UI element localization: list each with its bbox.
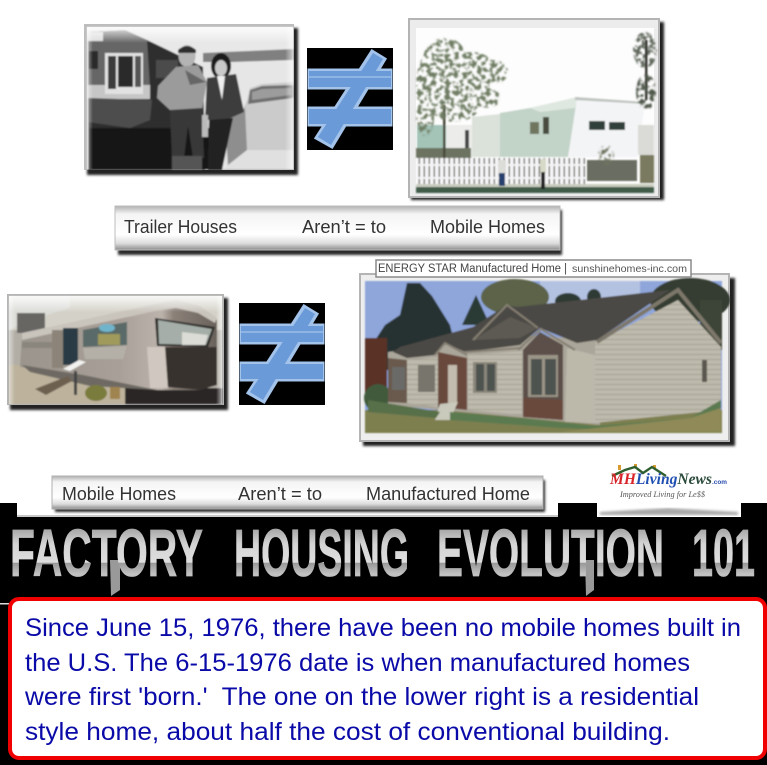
photo: energy star manufactured home — [359, 273, 735, 446]
caption: energy star manufactured home source: sunshinehomes-inc.com — [572, 263, 687, 275]
title: factory housing evolution 101: FACTORY — [10, 516, 203, 591]
logo tagline: Improved Living for Le$$ — [619, 489, 706, 499]
label: trailer houses: Trailer Houses — [124, 217, 237, 237]
photo: 1950s mobile home behind picket fence — [408, 18, 664, 200]
title: factory housing evolution 101 — [10, 516, 755, 596]
caption: energy star manufactured home source: ENERGY STAR Manufactured Home | — [378, 263, 567, 275]
callout text: style home, about half the cost of conventional building. — [25, 718, 670, 746]
black title band — [0, 495, 767, 765]
callout text: the U.S. The 6-15-1976 date is when manufactured homes — [25, 649, 690, 677]
logo wordmark: MHLivingNews — [609, 471, 712, 488]
title: factory housing evolution 101: HOUSING — [234, 516, 409, 591]
photo: silver vintage mobile home in museum — [7, 294, 228, 410]
icon: not equal sign (top) — [307, 48, 393, 150]
callout text: Since June 15, 1976, there have been no mobile homes built in — [25, 614, 741, 642]
label: aren't equal to: Aren’t = to — [238, 484, 322, 504]
callout text: were first 'born.' The one on the lower right is a residential — [24, 683, 699, 711]
caption: energy star manufactured home source — [376, 260, 691, 277]
icon: not equal sign (lower) — [239, 303, 325, 405]
photo: couple in front of trailer house — [84, 24, 298, 175]
label bar: mobile homes vs manufactured home — [52, 476, 545, 512]
label: aren't equal to: Aren’t = to — [302, 217, 386, 237]
label: mobile homes: Mobile Homes — [430, 217, 545, 237]
callout: explanatory text box — [0, 599, 765, 758]
callout text — [24, 614, 741, 746]
label bar: trailer houses vs mobile homes — [115, 206, 562, 255]
label: manufactured home: Manufactured Home — [366, 484, 530, 504]
logo: MHLivingNews: .com — [712, 480, 727, 486]
icon: green rooflines — [612, 464, 666, 476]
logo: MHLivingNews — [597, 455, 741, 517]
label: mobile homes: Mobile Homes — [62, 484, 176, 504]
